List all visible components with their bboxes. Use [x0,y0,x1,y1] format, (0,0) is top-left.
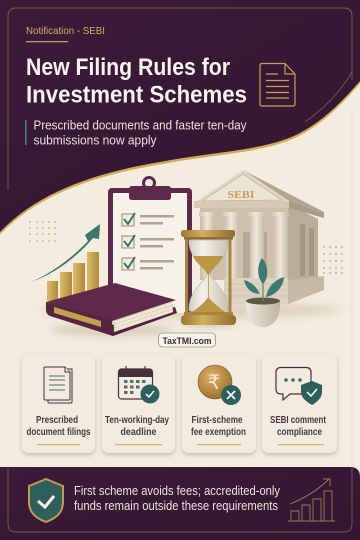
icon: shield check [29,479,63,522]
cream panel side line [351,108,353,467]
TaxTMI badge: TaxTMI.com [162,336,212,346]
steps [224,278,288,304]
header background curve [0,0,360,234]
subtitle: Prescribed documents and faster ten-day [34,118,247,132]
header eyebrow: Notification - SEBI [26,25,105,37]
columns [199,212,289,280]
dot pattern left [29,221,56,242]
roof side [243,170,324,217]
back cover [46,307,177,336]
icon: rupee coin: ₹ [208,370,220,394]
icon: speech bubble and shield [276,368,322,405]
header frame line [8,8,352,190]
illustration [29,170,343,336]
title: Investment Schemes [26,82,247,108]
pages [114,302,173,332]
icon: bank building SEBI [194,170,324,304]
card 3: first-scheme fee exemption [182,354,256,453]
icon: document [260,64,295,106]
icon: clipboard checklist [108,178,192,313]
subtitle [25,118,250,148]
takeaway text: First scheme avoids fees; accredited-only [74,483,281,498]
rear wall [200,208,288,280]
label: compliance [277,426,322,438]
top cover [46,283,176,321]
side wall [288,204,318,282]
label: Ten-working-day [105,414,169,426]
card 4: SEBI comment compliance [262,354,337,453]
bottom band [0,467,360,540]
icon: calendar [118,366,160,404]
icon: documents [44,367,72,403]
label: First-scheme [192,414,243,426]
ground shadow [40,301,340,319]
spine label [54,307,101,327]
icon: book [46,283,177,336]
header eyebrow [26,25,105,42]
icon: growth chart outline [288,479,335,521]
label: document filings [26,426,91,438]
icon: bank building SEBI: SEBI [228,189,254,201]
label: fee exemption [191,426,246,438]
icon: hourglass [181,230,236,326]
decorative gold arc [305,72,352,122]
title: New Filing Rules for [26,54,230,81]
pediment [194,170,289,208]
label: deadline [120,426,157,438]
takeaway text: funds remain outside these requirements [74,498,278,513]
label: SEBI comment [270,414,326,426]
label: Prescribed [36,414,78,426]
TaxTMI badge [158,333,216,347]
subtitle: submissions now apply [34,132,157,148]
dot pattern right [323,246,343,274]
bar chart with arrow [31,224,100,301]
card 1: prescribed document filings [22,354,95,453]
icon: plant in pot [244,258,284,327]
spine [46,302,113,336]
card 2: ten-working-day deadline [102,354,175,453]
